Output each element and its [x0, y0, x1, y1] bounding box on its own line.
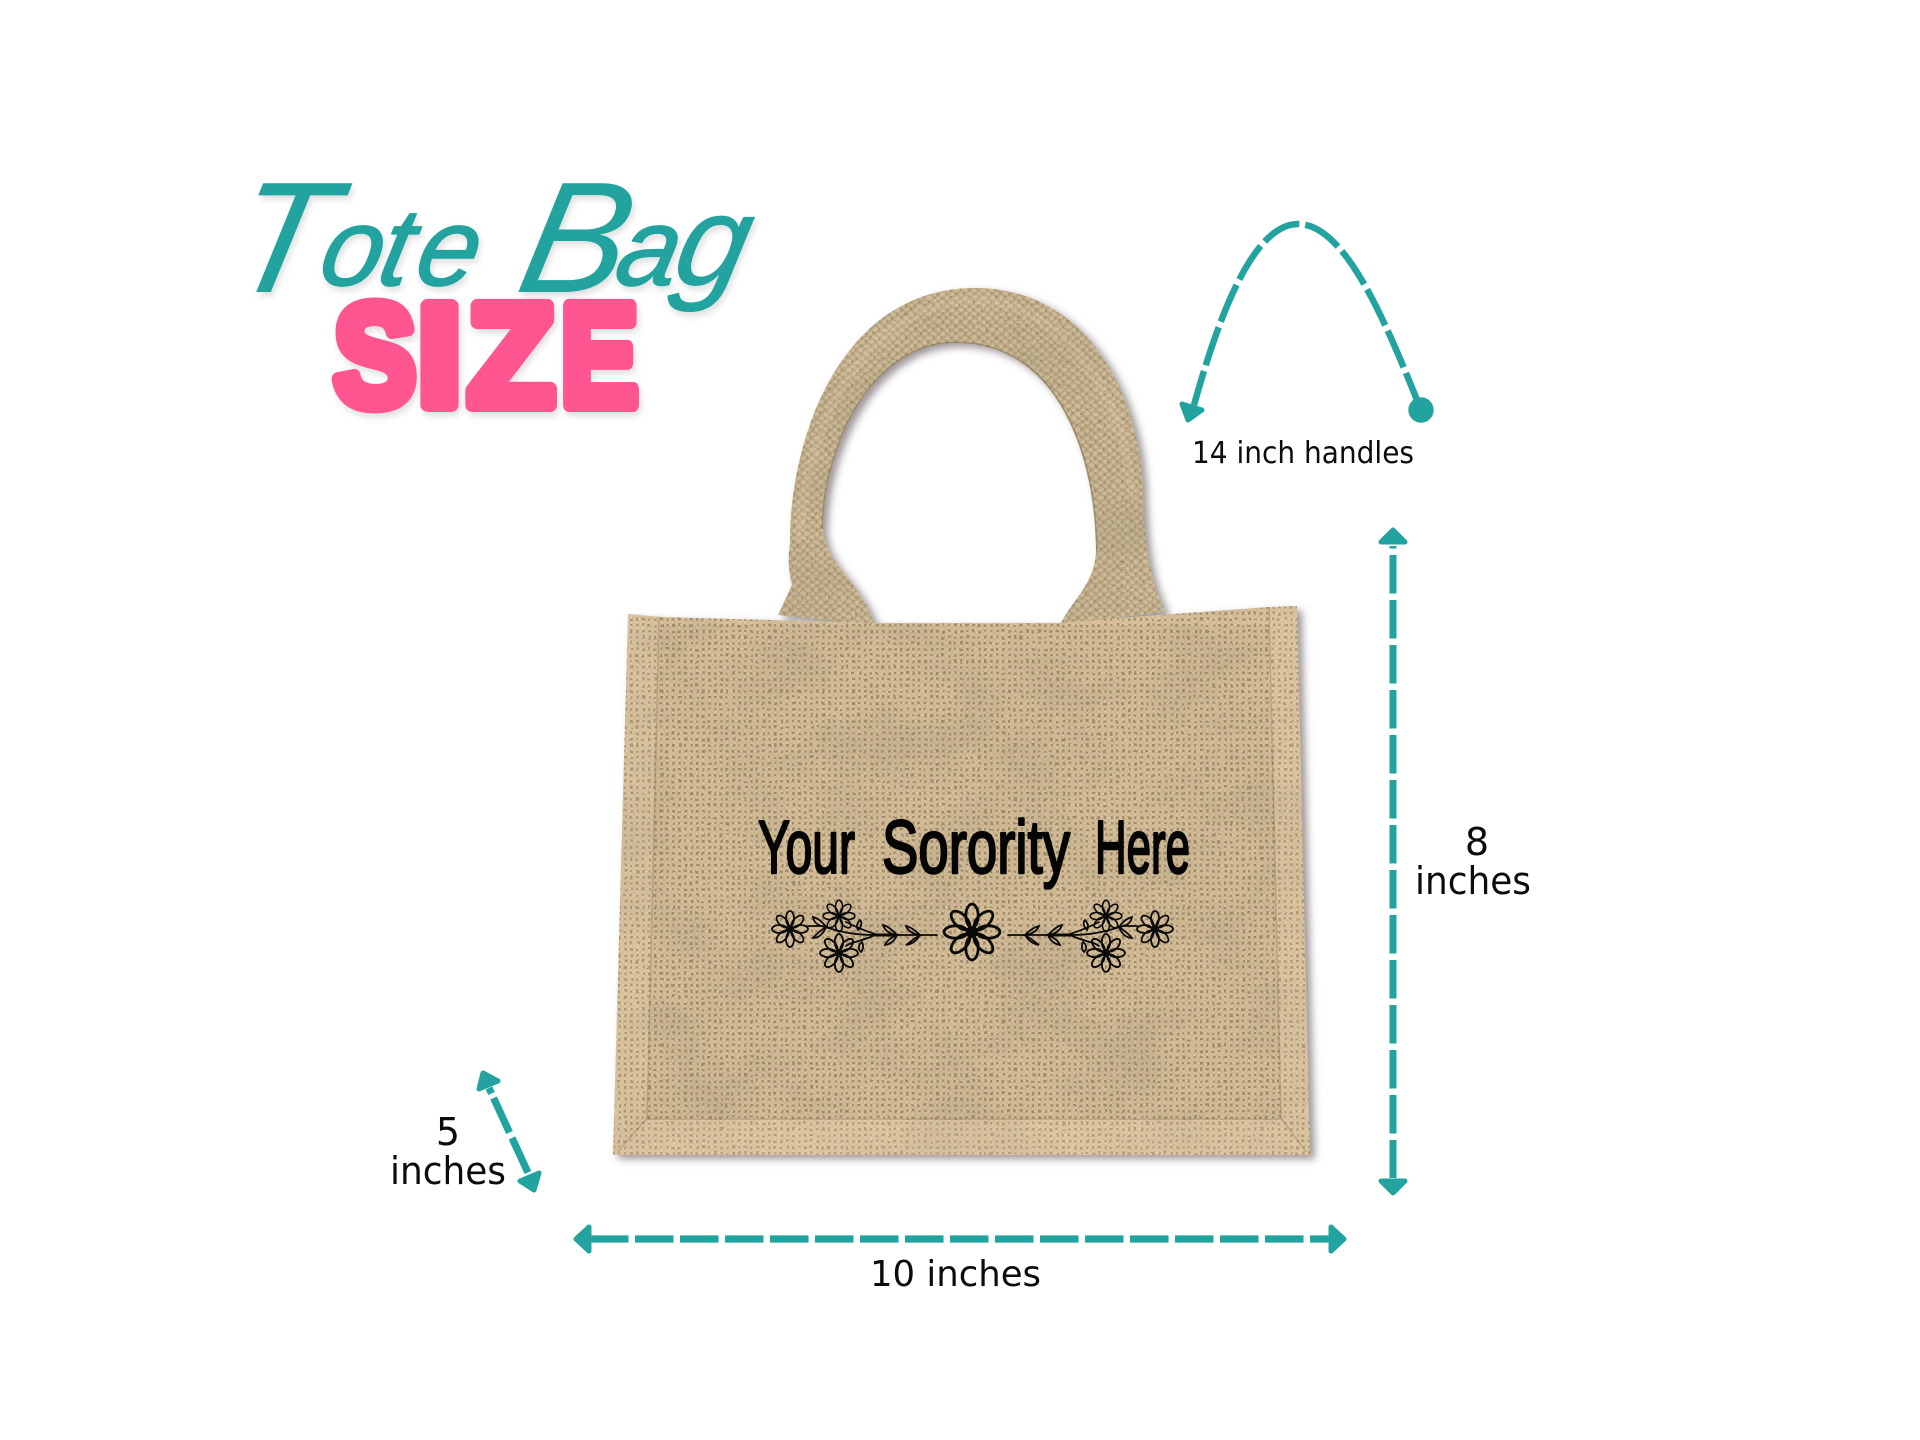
- arrow: width 10 inches: [576, 1227, 1344, 1251]
- arrow: handle length curve: [1182, 224, 1434, 423]
- title script line: Tote Bag: e: [407, 185, 494, 309]
- label: 5 inches: inches: [390, 1149, 506, 1193]
- title bold line: SIZE: Z: [468, 276, 554, 436]
- title script line: Tote Bag: a: [607, 185, 694, 309]
- left floral spray: [772, 900, 937, 972]
- title bold line: SIZE: I: [418, 276, 462, 436]
- bag handle: [770, 280, 1170, 630]
- bag bottom band: [613, 1120, 1310, 1155]
- label: 5 inches: [390, 1110, 506, 1193]
- title script line: Tote Bag: t: [370, 185, 431, 309]
- bag print text: Your Sorority Here: [758, 805, 1190, 889]
- tote bag: [605, 280, 1325, 1160]
- bag left gusset: [613, 614, 659, 1155]
- bag print text: Your Sorority Here: Here: [1095, 805, 1190, 889]
- arrow: height 8 inches: [1381, 530, 1405, 1193]
- bag body: [605, 600, 1325, 1160]
- label: 10 inches: 10 inches: [870, 1254, 1041, 1295]
- bag right gusset: [1269, 606, 1310, 1155]
- bag front panel shading: [647, 625, 1281, 1118]
- title script line: Tote Bag: B: [506, 149, 649, 326]
- right floral spray: [1008, 900, 1173, 972]
- title script line: Tote Bag: o: [311, 185, 398, 309]
- bag print floral ornament: [772, 900, 1173, 972]
- title: Tote Bag Size: [216, 149, 770, 436]
- arrow: depth 5 inches: [479, 1073, 539, 1190]
- title script line: Tote Bag: T: [216, 149, 361, 326]
- label: 5 inches: 5: [436, 1110, 460, 1154]
- title bold line: SIZE: E: [561, 275, 638, 436]
- title script line: Tote Bag: g: [664, 170, 766, 313]
- title bold line: SIZE: [334, 275, 638, 436]
- centre flower: [944, 904, 1000, 960]
- bag print text: Your Sorority Here: Sorority: [882, 805, 1070, 889]
- label: 8 inches: inches: [1415, 859, 1531, 903]
- label: 8 inches: 8: [1465, 820, 1489, 864]
- label: 8 inches: [1415, 820, 1531, 903]
- title bold line: SIZE: S: [334, 276, 416, 436]
- bag print text: Your Sorority Here: Your: [758, 805, 855, 889]
- label: 14 inch handles: 14 inch handles: [1192, 436, 1414, 471]
